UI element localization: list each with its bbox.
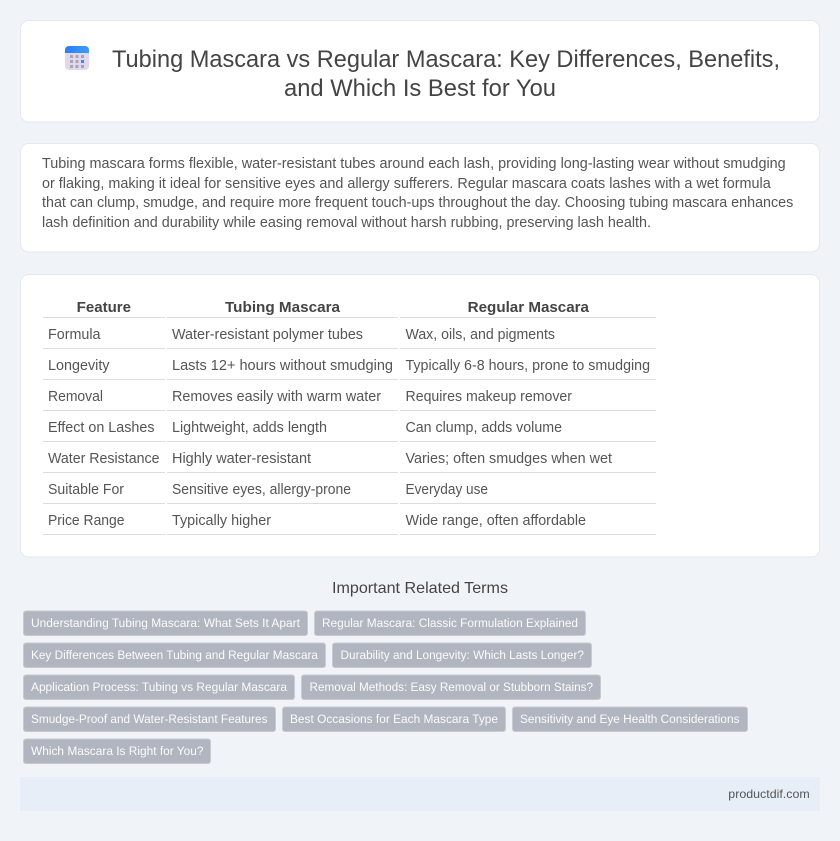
tags: related terms (24, 611, 748, 764)
title: and Which Is Best for You (284, 75, 556, 102)
row: removal: Removes easily with warm water (172, 389, 381, 405)
row: formula: Water-resistant polymer tubes (172, 327, 363, 343)
row: price range: Wide range, often affordable (406, 513, 586, 529)
row: removal: Requires makeup remover (406, 389, 572, 405)
footer: productdif.com (728, 787, 810, 801)
row: formula (48, 327, 555, 343)
row: price range: Typically higher (172, 513, 271, 529)
panel: description (20, 144, 820, 252)
row: longevity: Longevity (48, 358, 110, 374)
row: suitable for: Sensitive eyes, allergy-prone (172, 482, 351, 498)
panel: comparison table (20, 274, 820, 557)
row: water resistance: Varies; often smudges when wet (406, 451, 612, 467)
row: formula: Formula (48, 327, 100, 343)
row: water resistance (48, 451, 612, 467)
text block: description: Tubing mascara forms flexible, water-resistant tubes around each lash, providing long-lasting wear without smudging (42, 155, 786, 172)
row: longevity: Lasts 12+ hours without smudging (172, 358, 393, 374)
tags: related terms: Key Differences Between Tubing and Regular Mascara (31, 648, 318, 662)
title: Tubing Mascara vs Regular Mascara: Key Differences, Benefits, (112, 46, 780, 73)
row: effect on lashes (48, 420, 562, 436)
row: longevity: Typically 6-8 hours, prone to smudging (406, 358, 650, 374)
tags: related terms: Removal Methods: Easy Removal or Stubborn Stains? (310, 680, 593, 694)
icon: calendar (65, 46, 89, 70)
text block: description: or flaking, making it ideal for sensitive eyes and allergy sufferers. Regular mascara coats lashes with a wet formula (42, 175, 771, 192)
row: effect on lashes: Lightweight, adds length (172, 420, 327, 436)
table header (77, 299, 590, 316)
row: suitable for: Suitable For (48, 482, 124, 498)
tags: related terms: Understanding Tubing Mascara: What Sets It Apart (31, 616, 301, 630)
tags: related terms: Best Occasions for Each Mascara Type (290, 712, 498, 726)
footer (20, 777, 820, 811)
tags: related terms: Sensitivity and Eye Health Considerations (520, 712, 740, 726)
row: effect on lashes: Effect on Lashes (48, 420, 154, 436)
row: price range (48, 513, 586, 529)
row: price range: Price Range (48, 513, 124, 529)
tags: related terms: Regular Mascara: Classic Formulation Explained (322, 616, 578, 630)
row: removal: Removal (48, 389, 103, 405)
row: longevity (48, 358, 650, 374)
text block: description (42, 155, 793, 231)
panel: header (20, 20, 820, 122)
row: water resistance: Highly water-resistant (172, 451, 311, 467)
table header: Tubing Mascara (225, 299, 341, 316)
table header: Feature (77, 299, 131, 316)
row: suitable for: Everyday use (406, 482, 488, 498)
text block: description: lash definition and durability while easing removal without harsh rubbing, preserving lash health. (42, 214, 651, 231)
tags: related terms: Which Mascara Is Right for You? (31, 744, 204, 758)
row: water resistance: Water Resistance (48, 451, 160, 467)
tags: related terms: Durability and Longevity: Which Lasts Longer? (340, 648, 584, 662)
row: effect on lashes: Can clump, adds volume (406, 420, 562, 436)
heading: important related terms: Important Related Terms (332, 580, 508, 597)
text block: description: that can clump, smudge, and require more frequent touch-ups throughout the day. Choosing tubing mascara enhances (42, 194, 793, 211)
row: suitable for (48, 482, 488, 498)
tags: related terms: Application Process: Tubing vs Regular Mascara (31, 680, 287, 694)
row: removal (48, 389, 572, 405)
row: formula: Wax, oils, and pigments (406, 327, 555, 343)
table header: Regular Mascara (468, 299, 590, 316)
title (112, 46, 780, 102)
tags: related terms: Smudge-Proof and Water-Resistant Features (31, 712, 268, 726)
